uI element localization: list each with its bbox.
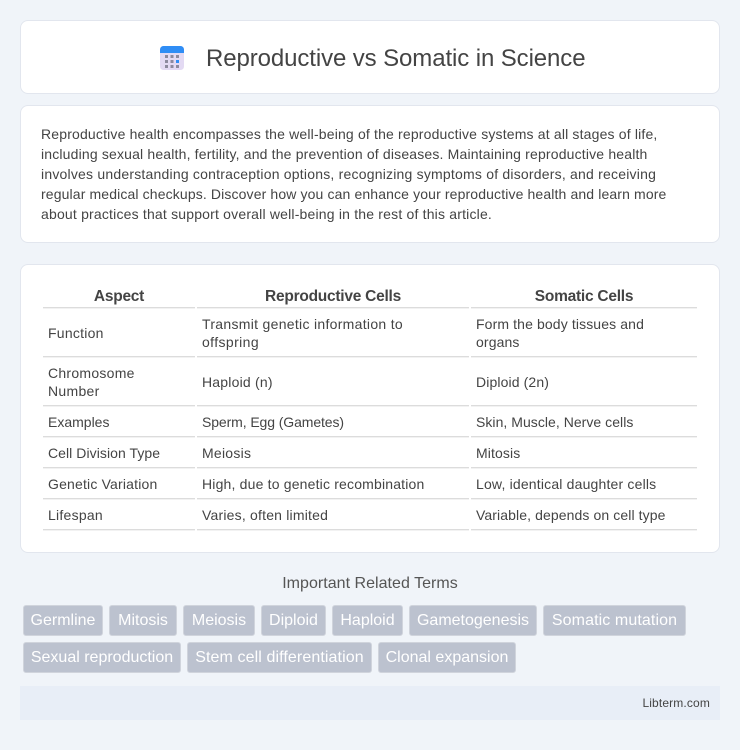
- panel: comparison table: [20, 264, 720, 553]
- footer credit: Libterm.com: [642, 696, 710, 710]
- footer: [20, 686, 720, 720]
- table header: Reproductive Cells: [265, 288, 401, 305]
- tag: Clonal expansion: [386, 649, 508, 666]
- row: examples: [48, 414, 633, 430]
- tag: Meiosis: [192, 612, 246, 629]
- row: chromosome number: Haploid (n): [202, 374, 273, 390]
- row: lifespan: Varies, often limited: [202, 507, 328, 523]
- title: Reproductive vs Somatic in Science: [206, 45, 585, 72]
- tag: [23, 642, 181, 673]
- row: genetic variation: High, due to genetic recombination: [202, 476, 424, 492]
- tag: Mitosis: [118, 612, 168, 629]
- tag list: related terms: [23, 605, 686, 673]
- row: genetic variation: Low, identical daughter cells: [476, 476, 656, 492]
- row: cell division type: Cell Division Type: [48, 445, 160, 461]
- row: chromosome number: Number: [48, 383, 100, 399]
- row: function: Function: [48, 325, 104, 341]
- intro text: regular medical checkups. Discover how you can enhance your reproductive health and learn more: [41, 186, 666, 202]
- tag: [109, 605, 177, 636]
- intro text: about practices that support overall well-being in the rest of this article.: [41, 206, 492, 222]
- tag: Germline: [31, 612, 95, 629]
- row: function: Transmit genetic information to: [202, 316, 403, 332]
- tag: [543, 605, 686, 636]
- intro text: involves understanding contraception options, recognizing symptoms of disorders, and receiving: [41, 166, 656, 182]
- tag: [332, 605, 403, 636]
- tag: [187, 642, 372, 673]
- table header: Somatic Cells: [535, 288, 633, 305]
- tag: [378, 642, 516, 673]
- row: examples: Skin, Muscle, Nerve cells: [476, 414, 633, 430]
- tag: [23, 605, 103, 636]
- tag: [183, 605, 255, 636]
- panel: intro paragraph: [20, 105, 720, 243]
- row: lifespan: Lifespan: [48, 507, 103, 523]
- heading: related terms: Important Related Terms: [282, 575, 458, 592]
- row: chromosome number: [48, 365, 549, 399]
- row: cell division type: Mitosis: [476, 445, 520, 461]
- intro text: Reproductive health encompasses the well-being of the reproductive systems at all stages of life,: [41, 126, 657, 142]
- tag: Stem cell differentiation: [195, 649, 364, 666]
- row: function: [48, 316, 644, 350]
- tag: Diploid: [269, 612, 318, 629]
- table header: Aspect: [94, 288, 144, 305]
- tag: Sexual reproduction: [31, 649, 173, 666]
- row: lifespan: [48, 507, 666, 523]
- intro text: including sexual health, fertility, and the prevention of diseases. Maintaining reproductive health: [41, 146, 647, 162]
- row: examples: Examples: [48, 414, 109, 430]
- row: chromosome number: Chromosome: [48, 365, 135, 381]
- panel: title header: [20, 20, 720, 94]
- row: cell division type: [48, 445, 520, 461]
- table header: [94, 288, 633, 305]
- icon: calendar: [160, 46, 184, 70]
- tag: [409, 605, 537, 636]
- row: genetic variation: [48, 476, 656, 492]
- row: examples: Sperm, Egg (Gametes): [202, 414, 344, 430]
- row: cell division type: Meiosis: [202, 445, 251, 461]
- row: function: offspring: [202, 334, 259, 350]
- tag: Somatic mutation: [552, 612, 677, 629]
- row: genetic variation: Genetic Variation: [48, 476, 157, 492]
- intro text: [41, 126, 666, 222]
- tag: [261, 605, 326, 636]
- row: chromosome number: Diploid (2n): [476, 374, 549, 390]
- tag: Gametogenesis: [417, 612, 529, 629]
- row: function: Form the body tissues and: [476, 316, 644, 332]
- tag: Haploid: [340, 612, 395, 629]
- row: lifespan: Variable, depends on cell type: [476, 507, 666, 523]
- row: function: organs: [476, 334, 520, 350]
